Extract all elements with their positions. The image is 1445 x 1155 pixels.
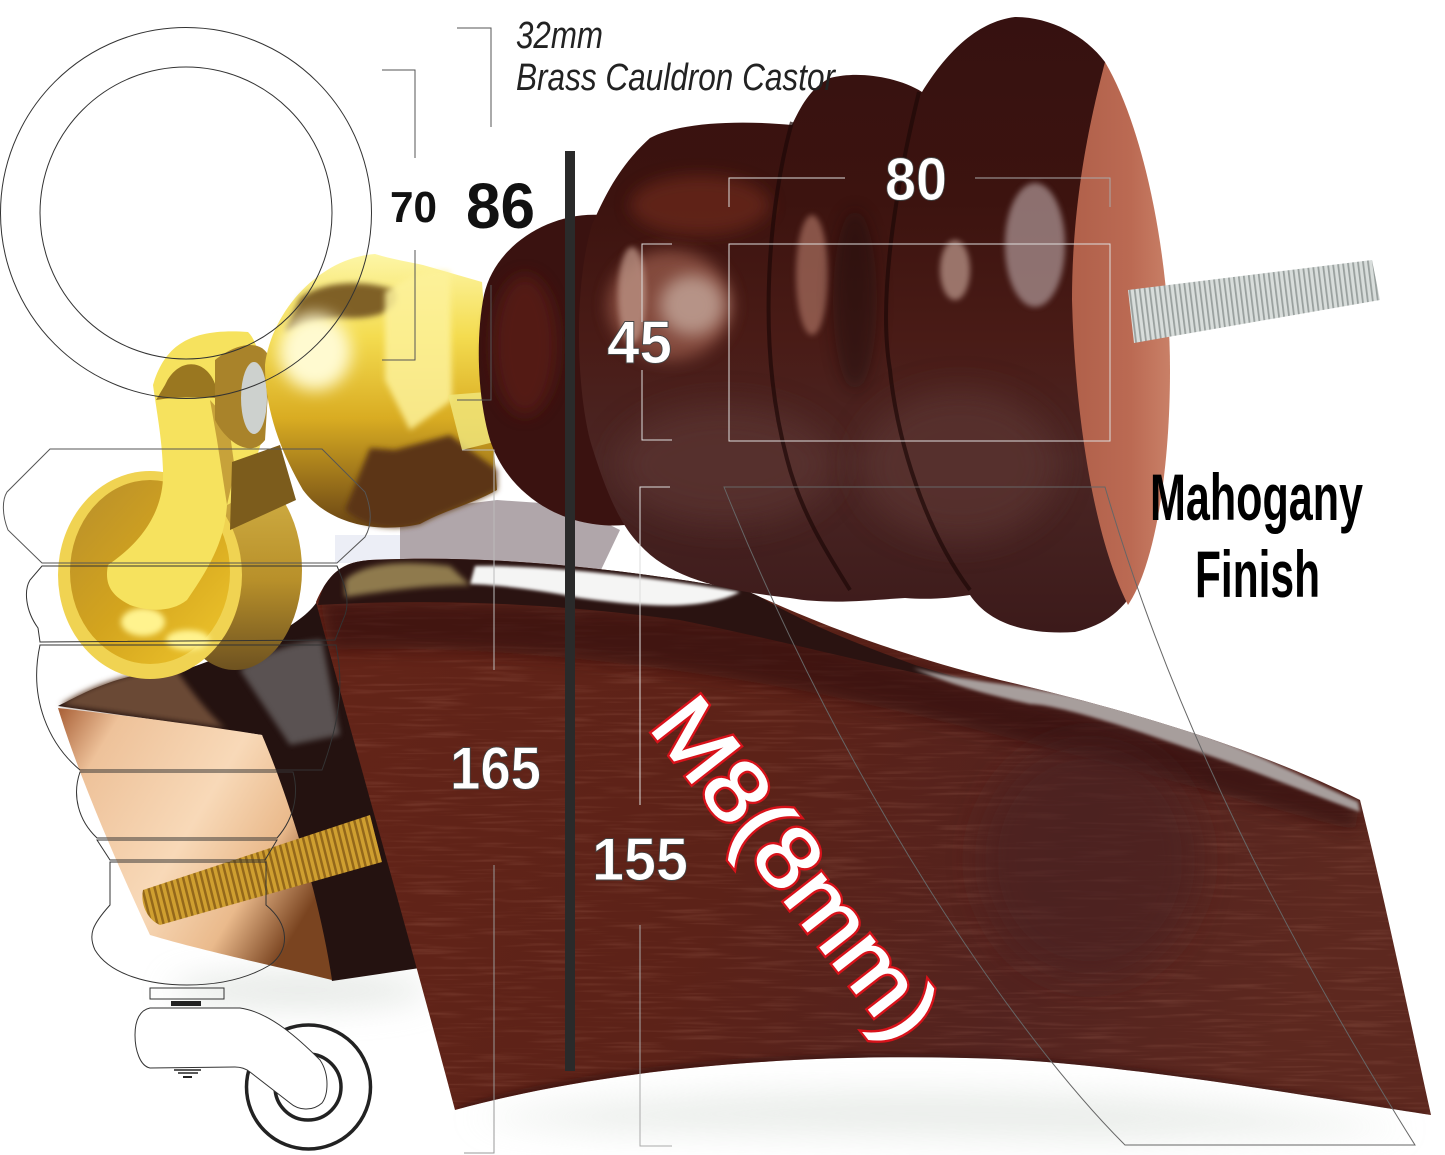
brass cauldron castor wheel [58,471,242,679]
silver M8 threaded bolt [1128,260,1380,343]
ring groove shading [769,92,970,590]
label: 45: 45 [607,309,672,376]
label: 86: 86 [466,170,535,242]
technical drawing: wedge profile [724,487,1415,1145]
black centre divider [565,151,575,1071]
technical drawing: castor [135,1001,370,1149]
dimension brackets: leg [462,178,1110,1153]
label: 155: 155 [592,826,688,893]
floor shadow [170,972,1410,1140]
small block: end grain face [58,708,332,980]
dimension brackets: castor diameter [382,28,491,400]
label: Mahogany Finish [1150,460,1363,611]
label: castor type: 32mm [516,15,603,57]
label: castor type [516,15,836,99]
large wedge wooden leg [316,554,1431,1122]
bead highlight [493,275,557,415]
label: M8 (8mm) thread size: M8(8mm) [633,678,960,1058]
fork shading [156,364,235,505]
brass yoke and silver pin [215,345,296,530]
technical drawing: castor wheel circles [0,28,372,398]
glossy top edge [318,554,1360,812]
label: 165: 165 [450,735,541,802]
grey reflection behind wedge [335,500,620,572]
small mahogany bead of turned leg [479,215,640,526]
label: Mahogany Finish: Finish [1195,537,1320,611]
small block: top and side faces [58,600,440,981]
wedge tonal shading [320,600,1431,1122]
label: castor type: Brass Cauldron Castor [516,57,836,99]
label: 80: 80 [885,146,947,213]
turned mahogany bun foot [579,17,1140,633]
label: 70: 70 [390,183,437,232]
label: M8 (8mm) thread size: M8(8mm) [633,678,960,1058]
leg reflections [608,175,1065,540]
technical drawing: leg side profile [3,449,370,999]
wedge grain [316,559,1431,1115]
brass threaded stud [142,815,382,925]
brass wheel rear [168,470,302,670]
unfinished wood base face [1072,62,1170,605]
brass ball and collar [265,254,497,528]
brass fork arm [107,331,263,610]
